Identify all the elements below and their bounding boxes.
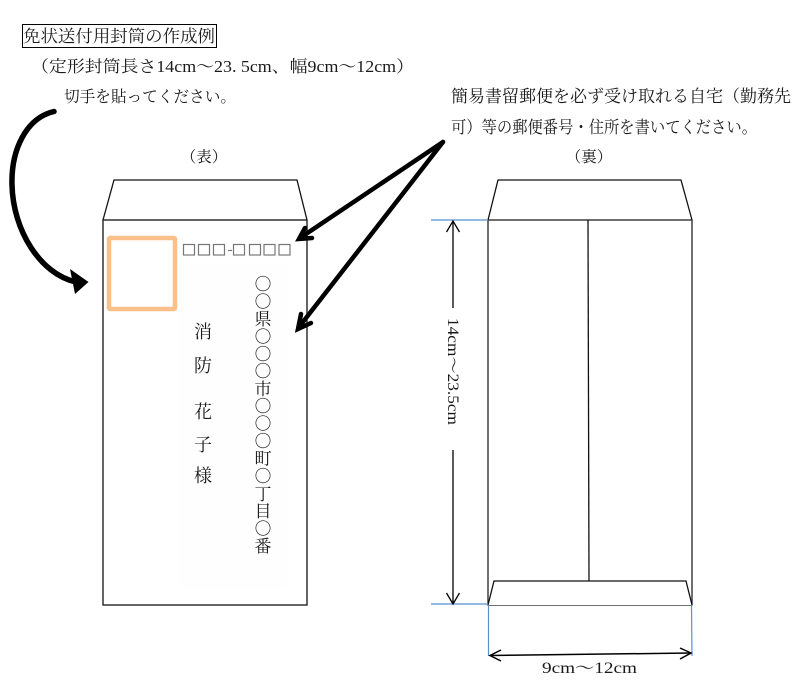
recipient address: ○ (254, 514, 272, 540)
recipient address: ○ (254, 288, 272, 312)
recipient address: ○ (254, 410, 272, 434)
dimension guide lines (431, 220, 692, 656)
recipient name (194, 322, 212, 486)
front envelope (103, 180, 307, 605)
text: address instruction: 可）等の郵便番号・住所を書いてください。 (451, 118, 757, 137)
dimension label: width: 9cm～12cm (542, 660, 637, 677)
text: stamp instruction: 切手を貼ってください。 (64, 88, 236, 106)
title: 免状送付用封筒の作成例 (23, 27, 215, 46)
recipient address: ○ (254, 357, 272, 382)
text: envelope size note: （定形封筒長さ14cm～23. 5cm、幅9cm～12cm） (31, 57, 414, 76)
recipient address: 番 (254, 532, 272, 557)
recipient address: ○ (254, 340, 272, 365)
arrow: curved to stamp (12, 112, 89, 294)
recipient name: 花 (194, 402, 212, 422)
dimension arrow: height (446, 221, 460, 604)
recipient address: 市 (254, 375, 272, 400)
recipient address: ○ (254, 270, 272, 295)
dimension label: height: 14cm～23.5cm (444, 318, 461, 425)
back envelope (488, 180, 692, 605)
recipient name: 様 (194, 466, 212, 486)
arrow: to postal code (299, 142, 443, 239)
recipient address: ○ (254, 427, 272, 452)
recipient address (254, 270, 272, 557)
recipient address: ○ (254, 462, 272, 487)
recipient address: ○ (254, 392, 272, 417)
recipient name: 子 (194, 435, 212, 455)
recipient address: 町 (254, 444, 272, 470)
recipient name: 消 (194, 322, 212, 342)
arrow: to address (298, 142, 443, 329)
stamp placeholder (109, 238, 175, 309)
dimension arrow: width (490, 648, 691, 661)
text: address instruction (451, 87, 791, 137)
label: front: （表） (181, 148, 227, 166)
recipient address: ○ (254, 322, 272, 348)
recipient name: 防 (194, 356, 212, 376)
recipient address: 県 (254, 305, 272, 330)
label: back: （裏） (566, 148, 612, 166)
text: address instruction: 簡易書留郵便を必ず受け取れる自宅（勤務先 (451, 87, 791, 106)
recipient address: 丁 (254, 480, 272, 505)
postal code boxes (184, 244, 290, 255)
recipient address: 目 (254, 497, 272, 522)
